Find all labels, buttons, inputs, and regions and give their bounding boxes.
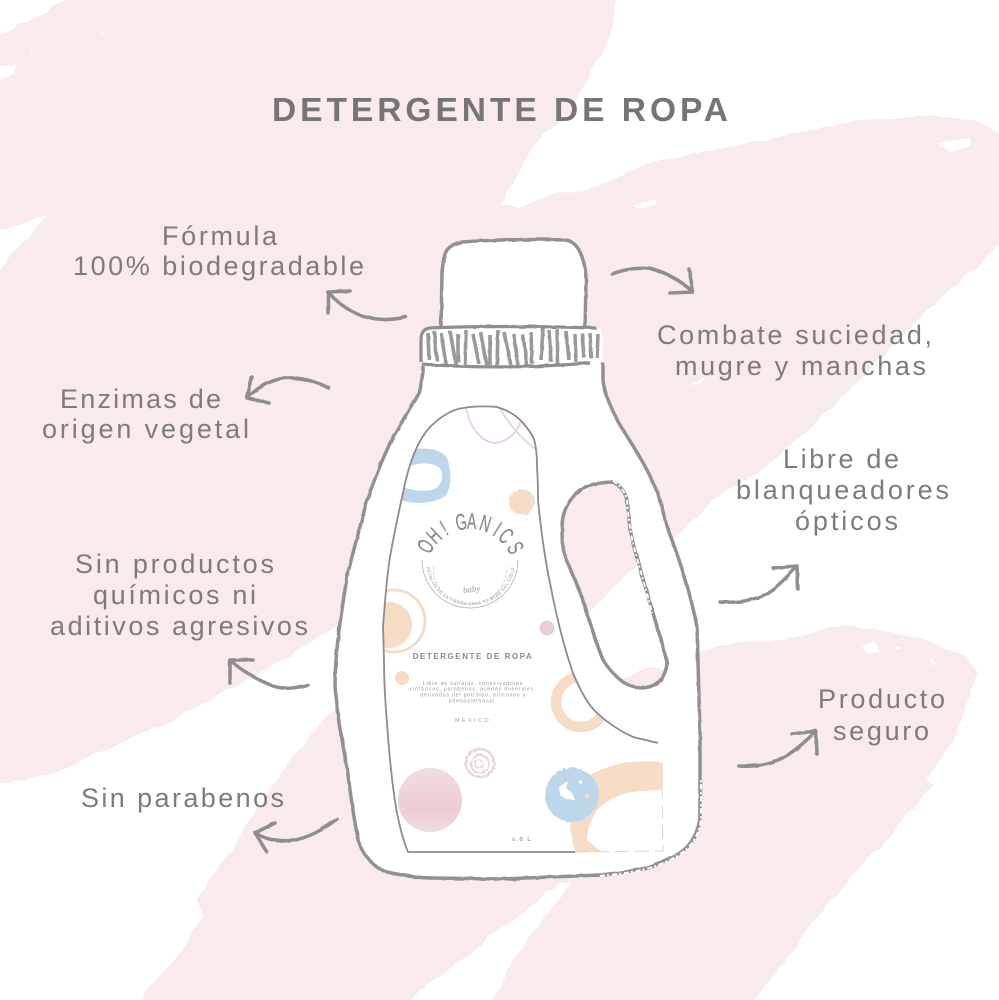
callout: sin productos quimicos: Sin productos: [75, 549, 274, 579]
pink spiral: [466, 749, 494, 777]
callout: libre de blanqueadores: blanqueadores: [736, 475, 949, 505]
label text: [410, 652, 536, 843]
callout: producto seguro: seguro: [833, 716, 929, 746]
orange dot: [509, 489, 535, 515]
arrow: combate: [612, 268, 693, 293]
logo wordmark: G: [454, 510, 469, 537]
label description: derivados del petróleo, silicones y: [420, 692, 526, 698]
callout: producto seguro: [818, 684, 945, 746]
bottle collar: [421, 326, 604, 367]
arrow: libre: [720, 566, 798, 602]
arrow: parabenos: [255, 819, 337, 852]
callout: enzimas: Enzimas de: [60, 384, 221, 414]
arrow: producto: [739, 731, 817, 766]
callout: libre de blanqueadores: Libre de: [783, 444, 899, 474]
callout: sin productos quimicos: aditivos agresivos: [50, 611, 308, 641]
label heading: DETERGENTE DE ROPA: [413, 652, 533, 661]
watercolor circle: [398, 768, 462, 832]
logo wordmark: C: [493, 524, 518, 549]
label volume: s.6 L: [512, 836, 532, 843]
callout: combate suciedad: [657, 320, 932, 381]
orange band: [570, 761, 664, 853]
callout: formula biodegradable: Fórmula: [162, 221, 278, 251]
logo wordmark: O: [413, 536, 440, 558]
callout: enzimas: [42, 384, 249, 444]
logo wordmark: !: [437, 517, 453, 541]
logo wordmark: [413, 510, 528, 559]
title: DETERGENTE DE ROPA: [272, 92, 728, 129]
logo wordmark: N: [476, 511, 494, 538]
callout: formula biodegradable: 100% biodegradable: [73, 251, 364, 281]
label description: cintáricos, parabenos, aceites minerales,: [410, 686, 536, 692]
label origin: MÉXICO: [455, 717, 491, 724]
bottle: [332, 237, 702, 882]
logo script: baby: [462, 583, 481, 595]
callout: combate suciedad: mugre y manchas: [675, 351, 926, 381]
arrow: sin productos: [230, 660, 308, 688]
label outline: [383, 406, 658, 852]
brush stroke: lower pink: [140, 626, 978, 1000]
logo: PÉTALOS DE LA TIERRA PARA TU BEBÉ DEL CIELO: [426, 567, 514, 606]
label description: [410, 681, 536, 704]
small orange dot: [395, 671, 409, 685]
callout: sin productos quimicos: químicos ni: [93, 580, 256, 610]
brush stroke: upper pink: [0, 0, 999, 786]
pink arcs: [466, 405, 537, 450]
logo tagline: [426, 561, 515, 606]
label outline faint edge: [575, 790, 663, 852]
logo wordmark: I: [488, 518, 505, 542]
bottle body: [335, 362, 700, 879]
blue ring: [402, 448, 450, 503]
logo inner ring: [433, 567, 507, 604]
callout: enzimas: origen vegetal: [42, 414, 249, 444]
arrow: enzimas: [247, 377, 329, 403]
logo wordmark: A: [467, 510, 477, 535]
paint flecks: [0, 33, 971, 665]
logo: [413, 510, 528, 608]
logo wordmark: S: [501, 538, 528, 559]
pink dot: [540, 620, 554, 636]
collar ribs: [428, 328, 598, 366]
callout: libre de blanqueadores: ópticos: [795, 506, 898, 536]
arrows: [230, 268, 817, 852]
orange ring: [556, 677, 606, 727]
callout: producto seguro: Producto: [818, 684, 945, 714]
handle outline: [562, 482, 667, 688]
callout: combate suciedad: Combate suciedad,: [657, 320, 932, 350]
arrow: formula: [328, 291, 406, 319]
blue textured dot: [545, 768, 599, 822]
callout: libre de blanqueadores: [736, 444, 949, 536]
logo rim: [422, 560, 518, 608]
callout: formula biodegradable: [73, 221, 364, 281]
bottle cap: [441, 240, 586, 328]
label artwork: [363, 405, 664, 853]
logo wordmark: H: [422, 524, 447, 549]
callout: sin productos quimicos: [50, 549, 308, 641]
label description: phenoxiethanol.: [449, 698, 497, 704]
label description: Libre de sulfatos, conservadores: [423, 681, 523, 687]
callout: sin parabenos: Sin parabenos: [81, 783, 284, 813]
orange disc and ring: [384, 588, 426, 654]
bottle outline: [335, 363, 700, 879]
